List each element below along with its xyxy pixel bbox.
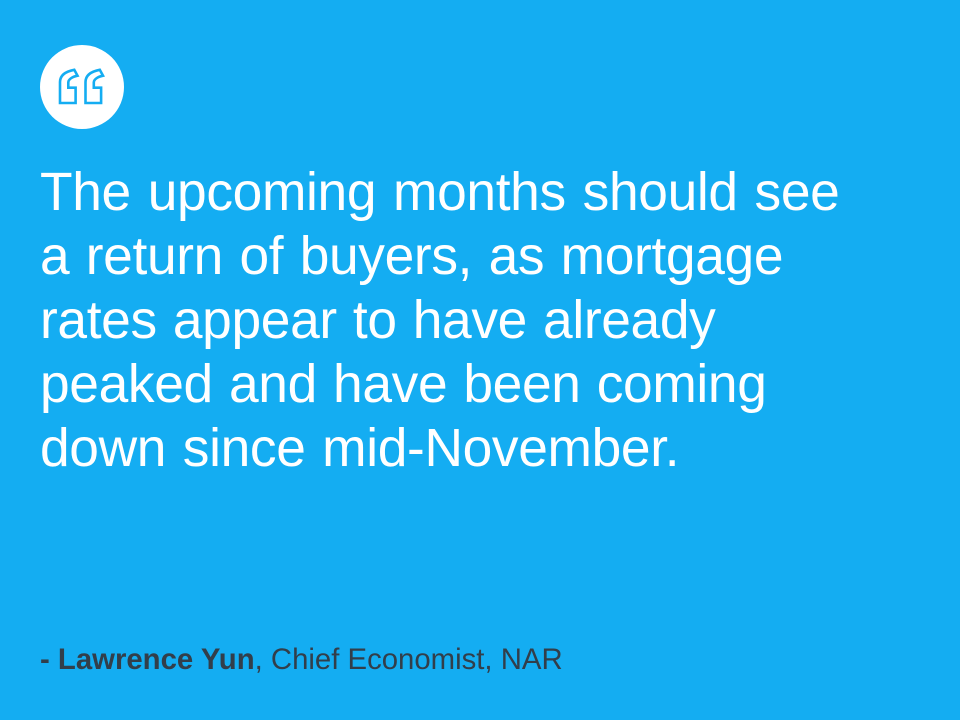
quote text: a return of buyers, as mortgage bbox=[40, 227, 783, 286]
attribution: - Lawrence Yun, Chief Economist, NAR bbox=[40, 643, 563, 676]
icon: quotation mark badge bbox=[40, 45, 124, 129]
quote text: down since mid-November. bbox=[40, 419, 679, 478]
quote text bbox=[40, 163, 840, 478]
quote text: peaked and have been coming bbox=[40, 355, 767, 414]
quote text: rates appear to have already bbox=[40, 291, 716, 350]
quote text: The upcoming months should see bbox=[40, 163, 840, 222]
